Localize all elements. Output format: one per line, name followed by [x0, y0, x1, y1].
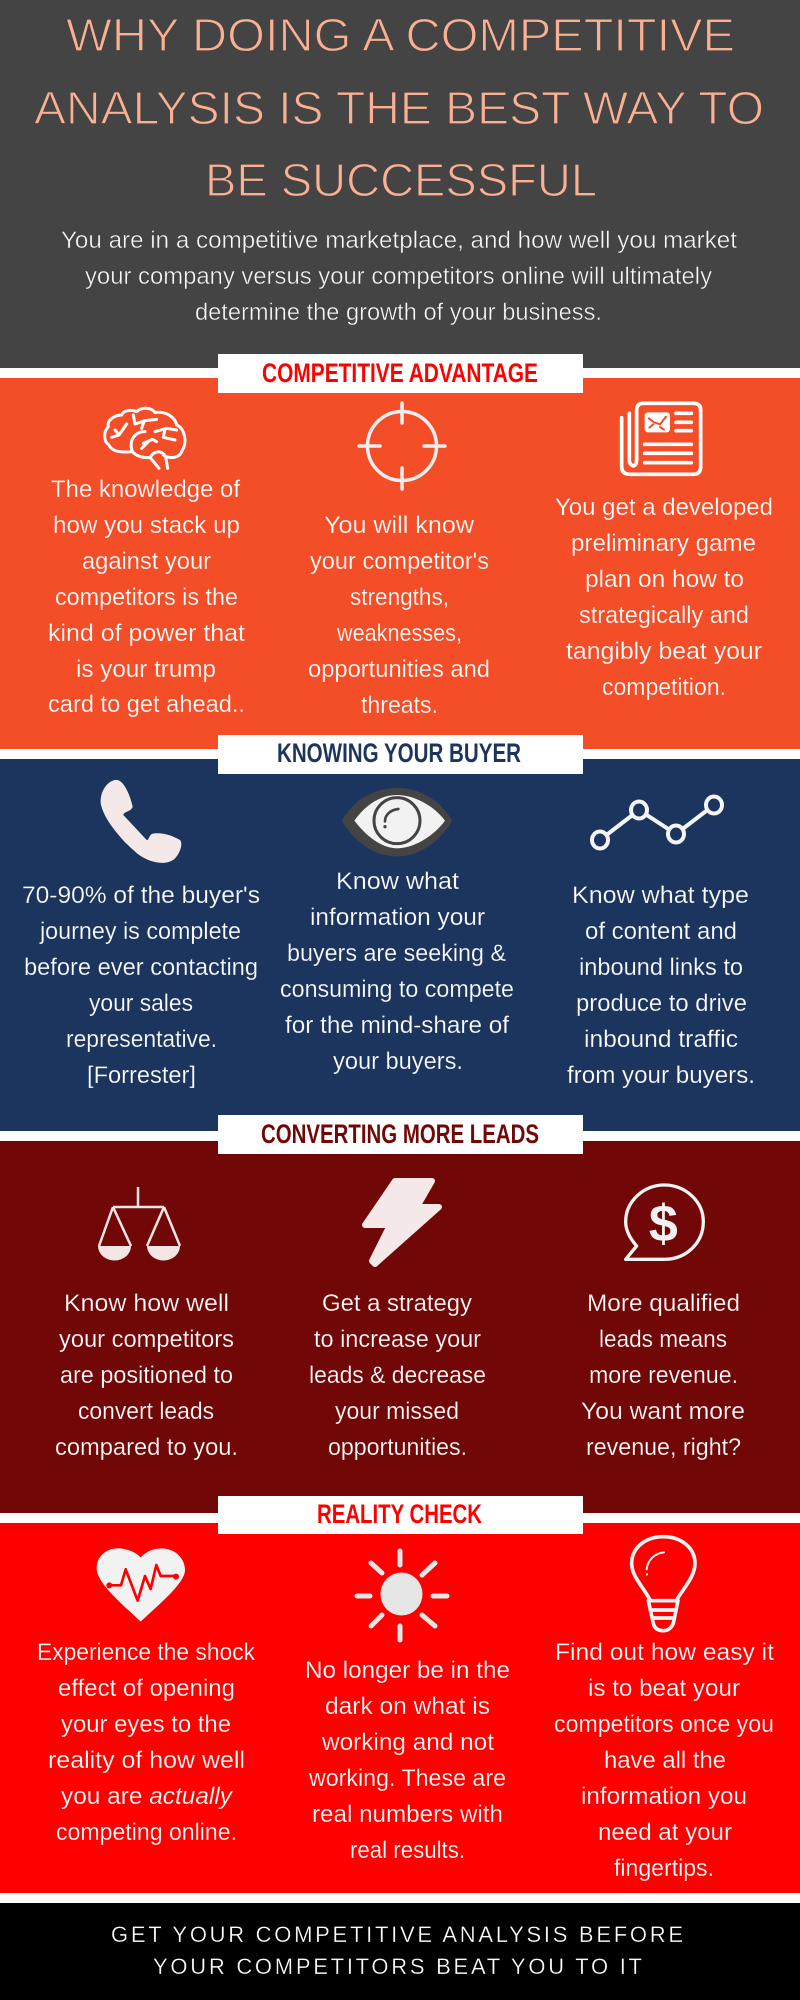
text: column 2: dark on what is [325, 1693, 490, 1720]
text: column 2: buyers are seeking & [287, 940, 506, 967]
text: column 1: competing online. [56, 1819, 237, 1846]
text: column 2: your missed [335, 1398, 459, 1425]
text: column 3 [554, 1639, 774, 1882]
text: column 3: leads means [599, 1326, 727, 1353]
icon: sun [357, 1551, 447, 1640]
text: column 3: is to beat your [588, 1675, 740, 1702]
text: column 3: more revenue. [589, 1362, 738, 1389]
text: column 2: strengths, [350, 584, 449, 611]
text: column 1: effect of opening [58, 1675, 235, 1702]
text: column 3: preliminary game [571, 530, 756, 557]
icon: eye [343, 789, 451, 855]
text: column 3: plan on how to [585, 566, 744, 593]
text: column 2: your competitor's [310, 548, 489, 575]
text: column 2: information your [310, 904, 485, 931]
text: column 1 [55, 1290, 238, 1461]
text: column 1: against your [82, 548, 211, 575]
text: column 2: for the mind-share of [285, 1012, 509, 1039]
section label: reality check: REALITY CHECK [317, 1499, 482, 1529]
text: column 2: opportunities and [308, 656, 490, 683]
panel: reality check [0, 1496, 800, 1893]
text: column 1: how you stack up [53, 512, 240, 539]
text: column 1: The knowledge of [51, 476, 240, 503]
text: column 1: convert leads [78, 1398, 214, 1425]
text: column 3: from your buyers. [567, 1062, 755, 1089]
text: column 1: Know how well [64, 1290, 229, 1317]
text: column 3: You want more [581, 1398, 745, 1425]
text: column 1: your eyes to the [61, 1711, 231, 1738]
footer text: YOUR COMPETITORS BEAT YOU TO IT [153, 1954, 642, 1979]
section label: knowing your buyer [218, 735, 583, 774]
text: column 2 [308, 512, 490, 719]
icon: brain [105, 408, 185, 468]
text: column 1: Experience the shock [37, 1639, 256, 1666]
text: column 3: You get a developed [555, 494, 773, 521]
icon: newspaper [622, 403, 701, 474]
text: column 2: real numbers with [312, 1801, 503, 1828]
text: column 2: your buyers. [333, 1048, 463, 1075]
text: column 2: real results. [350, 1837, 465, 1864]
section label: converting more leads: CONVERTING MORE LEADS [261, 1119, 539, 1149]
icon: light bulb [632, 1537, 695, 1631]
title: WHY DOING A COMPETITIVE [66, 9, 735, 61]
panel: footer call to action [0, 1903, 800, 2000]
title [34, 9, 764, 206]
text: column 1: kind of power that [48, 620, 245, 647]
text: column 1: card to get ahead.. [48, 691, 245, 718]
icon: balance scales [98, 1187, 180, 1260]
text: column 2: consuming to compete [280, 976, 514, 1003]
text: column 1: representative. [66, 1026, 217, 1053]
text: column 3: Know what type [572, 882, 749, 909]
icon: dollar speech bubble: $ [649, 1195, 678, 1253]
text: column 3: revenue, right? [586, 1434, 741, 1461]
text: column 1: your competitors [59, 1326, 234, 1353]
icon: line chart [592, 796, 722, 848]
text: column 1: your sales [89, 990, 193, 1017]
title: BE SUCCESSFUL [205, 154, 597, 206]
panel: converting more leads [0, 1115, 800, 1513]
text: column 1 [22, 882, 260, 1089]
text: column 3: tangibly beat your [566, 638, 762, 665]
text: column 3 [567, 882, 755, 1089]
text: column 2: No longer be in the [305, 1657, 510, 1684]
text: column 3 [581, 1290, 745, 1461]
text: column 1: competitors is the [55, 584, 238, 611]
text: column 1 [48, 476, 245, 718]
panel: knowing your buyer [0, 735, 800, 1131]
section label: knowing your buyer: KNOWING YOUR BUYER [277, 738, 521, 768]
text: column 3: competition. [602, 674, 726, 701]
panel: competitive advantage [0, 354, 800, 749]
title: ANALYSIS IS THE BEST WAY TO [34, 82, 764, 134]
intro text: determine the growth of your business. [195, 299, 602, 326]
icon: dollar speech bubble [626, 1185, 703, 1259]
intro text: your company versus your competitors online will ultimately [85, 263, 712, 290]
text: column 1: reality of how well [48, 1747, 245, 1774]
section label: competitive advantage [218, 354, 583, 393]
intro text [61, 227, 737, 326]
text: column 1: [Forrester] [87, 1062, 196, 1089]
text: column 2: to increase your [314, 1326, 481, 1353]
text: column 3: strategically and [579, 602, 749, 629]
text: column 3: need at your [598, 1819, 732, 1846]
text: column 3: competitors once you [554, 1711, 774, 1738]
footer text: GET YOUR COMPETITIVE ANALYSIS BEFORE [111, 1922, 683, 1947]
text: column 1 [37, 1639, 256, 1846]
icon: lightning bolt [365, 1181, 439, 1264]
text: column 2: You will know [324, 512, 475, 539]
text: column 2: working and not [321, 1729, 494, 1756]
text: column 3: inbound links to [579, 954, 743, 981]
text: column 3: information you [581, 1783, 747, 1810]
text: column 3: fingertips. [614, 1855, 714, 1882]
text: column 1: is your trump [76, 656, 216, 683]
text: column 1: journey is complete [39, 918, 241, 945]
text: column 1: before ever contacting [24, 954, 258, 981]
footer text [111, 1922, 683, 1979]
text: column 1: you are actually [61, 1783, 234, 1810]
text: column 2: weaknesses, [336, 620, 462, 647]
text: column 3: produce to drive [576, 990, 747, 1017]
text: column 3: inbound traffic [584, 1026, 738, 1053]
intro text: You are in a competitive marketplace, and how well you market [61, 227, 737, 254]
text: column 3 [555, 494, 773, 701]
text: column 2: Get a strategy [322, 1290, 472, 1317]
text: column 2: opportunities. [328, 1434, 467, 1461]
section label: reality check [218, 1496, 583, 1534]
icon: target crosshair [359, 403, 445, 489]
text: column 3: have all the [604, 1747, 726, 1774]
text: column 1: are positioned to [60, 1362, 233, 1389]
text: column 1: 70-90% of the buyer's [22, 882, 260, 909]
text: column 3: Find out how easy it [555, 1639, 774, 1666]
text: column 3: More qualified [587, 1290, 740, 1317]
text: column 2 [280, 868, 514, 1075]
text: column 2: working. These are [308, 1765, 506, 1792]
icon: telephone [101, 780, 181, 863]
text: column 2 [309, 1290, 486, 1461]
text: column 2: Know what [336, 868, 459, 895]
text: column 2 [305, 1657, 510, 1864]
text: column 2: threats. [361, 692, 438, 719]
section label: converting more leads [218, 1115, 583, 1154]
icon: heart with pulse [97, 1548, 185, 1622]
section label: competitive advantage: COMPETITIVE ADVANTAGE [262, 358, 538, 388]
text: column 3: of content and [585, 918, 737, 945]
panel: header [0, 0, 800, 368]
text: column 2: leads & decrease [309, 1362, 486, 1389]
text: column 1: compared to you. [55, 1434, 238, 1461]
